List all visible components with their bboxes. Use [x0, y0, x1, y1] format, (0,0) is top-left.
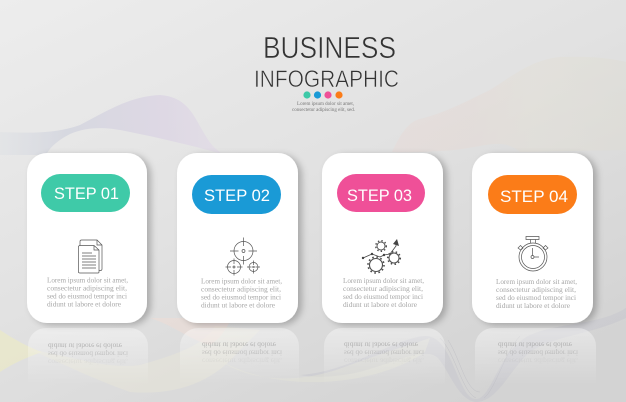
step 04 text: didunt ut labore et dolore	[496, 301, 570, 310]
title: INFOGRAPHIC	[254, 66, 399, 93]
panel: step 04	[472, 153, 593, 323]
step 03 text: Lorem ipsum dolor sit amet,	[343, 276, 424, 285]
title: BUSINESS	[263, 30, 396, 65]
reflection: step 01 card: sed do eiusmod tempor inci	[48, 350, 129, 358]
reflection: step 03 card: didunt ut labore et dolore	[344, 340, 418, 350]
title	[254, 30, 399, 93]
step 04 text: Lorem ipsum dolor sit amet,	[496, 277, 577, 286]
icon: documents	[78, 240, 102, 273]
step 01 pill: STEP 01	[54, 184, 119, 203]
step 04 pill	[488, 175, 577, 214]
step 03 pill: STEP 03	[347, 186, 412, 205]
reflection: step 04 card: sed do eiusmod tempor inci	[498, 348, 579, 358]
subtitle	[292, 101, 355, 113]
wave: top left lilac	[0, 95, 222, 155]
reflection: step 04 card: consectetur adipiscing elit,	[498, 356, 578, 366]
step 02 text: didunt ut labore et dolore	[201, 300, 275, 310]
step 03 text: didunt ut labore et dolore	[343, 300, 417, 309]
reflection: step 01 card: didunt ut labore et dolore	[48, 342, 122, 350]
wave: top right peach	[392, 57, 626, 152]
step 02 text: Lorem ipsum dolor sit amet,	[201, 276, 282, 286]
step 03 text: consectetur adipiscing elit,	[343, 284, 423, 293]
reflection: step 01 card	[28, 328, 148, 385]
reflection: step 01 card: consectetur adipiscing elit,	[48, 358, 128, 366]
step 01 text: didunt ut labore et dolore	[47, 300, 121, 308]
step 01 pill	[41, 174, 130, 212]
reflection: step 04 card	[475, 328, 596, 385]
step 03 text	[343, 276, 424, 309]
reflection: step 04 card: didunt ut labore et dolore	[498, 340, 572, 350]
reflection: step 02 card: consectetur adipiscing elit,	[202, 356, 282, 366]
step 04 text: sed do eiusmod tempor inci	[496, 293, 577, 302]
step 01 text: Lorem ipsum dolor sit amet,	[47, 276, 128, 284]
step 02 text: sed do eiusmod tempor inci	[201, 292, 282, 302]
step 01 text: consectetur adipiscing elit,	[47, 284, 127, 292]
subtitle: Lorem ipsum dolor sit amet,	[297, 101, 354, 107]
step 02 text	[201, 276, 282, 310]
reflection: step 03 card	[324, 328, 445, 385]
panel: step 01	[27, 153, 147, 323]
step 04 text: consectetur adipiscing elit,	[496, 285, 576, 294]
step 04 text	[496, 277, 577, 310]
icon: stopwatch	[518, 236, 548, 271]
reflection: step 02 card	[180, 328, 299, 385]
panel: step 02	[177, 153, 298, 323]
wave: lower left yellow and pink	[0, 318, 430, 393]
step 02 pill	[192, 175, 281, 214]
icon: targets	[226, 238, 260, 276]
step 01 text: sed do eiusmod tempor inci	[47, 292, 128, 300]
reflection: step 03 card: consectetur adipiscing elit,	[344, 356, 424, 366]
panel: step 03	[322, 153, 443, 323]
reflection: step 02 card: sed do eiusmod tempor inci	[202, 348, 283, 358]
subtitle: consectetur adipiscing elit, sed.	[292, 107, 355, 113]
step 03 text: sed do eiusmod tempor inci	[343, 292, 424, 301]
step 04 pill: STEP 04	[500, 187, 568, 206]
step 02 pill: STEP 02	[204, 186, 270, 205]
step 01 text	[47, 276, 128, 308]
icon: gears and trend arrow	[362, 239, 400, 273]
reflection: step 03 card: sed do eiusmod tempor inci	[344, 348, 425, 358]
step 02 text: consectetur adipiscing elit,	[201, 284, 281, 294]
colour dots	[303, 91, 343, 99]
wave: lower right grey	[300, 308, 626, 402]
reflection: step 02 card: didunt ut labore et dolore	[202, 340, 276, 350]
step 03 pill	[337, 174, 425, 212]
